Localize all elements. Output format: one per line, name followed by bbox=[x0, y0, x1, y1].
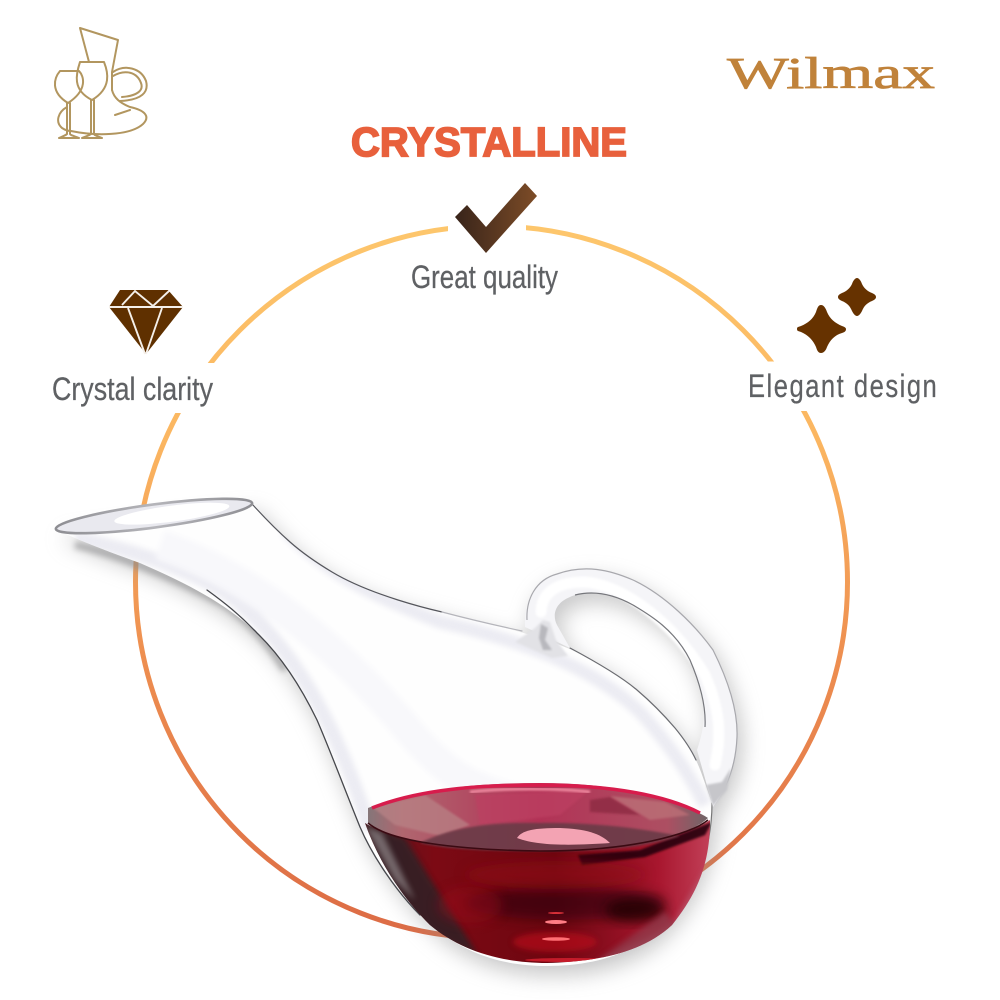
neck underside shadow bbox=[75, 545, 285, 670]
title: CRYSTALLINE bbox=[351, 119, 627, 165]
decanter lip bbox=[54, 492, 254, 540]
wine lower facet bbox=[614, 874, 701, 955]
feature ring bbox=[136, 212, 848, 938]
surface pink highlight bbox=[517, 828, 610, 845]
glass body bbox=[55, 503, 712, 966]
handle upper joint bbox=[515, 620, 568, 658]
wine highlights bbox=[545, 920, 567, 924]
glass reflections bbox=[75, 530, 705, 830]
logo wordmark: Wilmax: Wilmax bbox=[727, 49, 935, 98]
handle lower joint bbox=[706, 768, 731, 806]
icon: diamond bbox=[109, 290, 183, 354]
wine dark shade bbox=[465, 886, 665, 920]
wine surface bbox=[368, 783, 708, 851]
handle bbox=[515, 569, 737, 807]
decanter bbox=[54, 492, 742, 975]
decanter shadow bbox=[60, 512, 742, 975]
wine lower red glow bbox=[513, 932, 597, 952]
wine dark band bbox=[578, 822, 712, 865]
wine left dark facet bbox=[362, 822, 478, 955]
wine body bbox=[362, 820, 712, 965]
glass edge lines bbox=[207, 505, 712, 932]
label: crystal clarity: Crystal clarity bbox=[52, 371, 213, 407]
icon: sparkles bbox=[797, 278, 876, 353]
icon: check mark bbox=[455, 183, 537, 253]
label: elegant design: Elegant design bbox=[748, 369, 937, 405]
label: great quality: Great quality bbox=[411, 259, 558, 295]
logo icon: glassware bbox=[55, 28, 147, 138]
